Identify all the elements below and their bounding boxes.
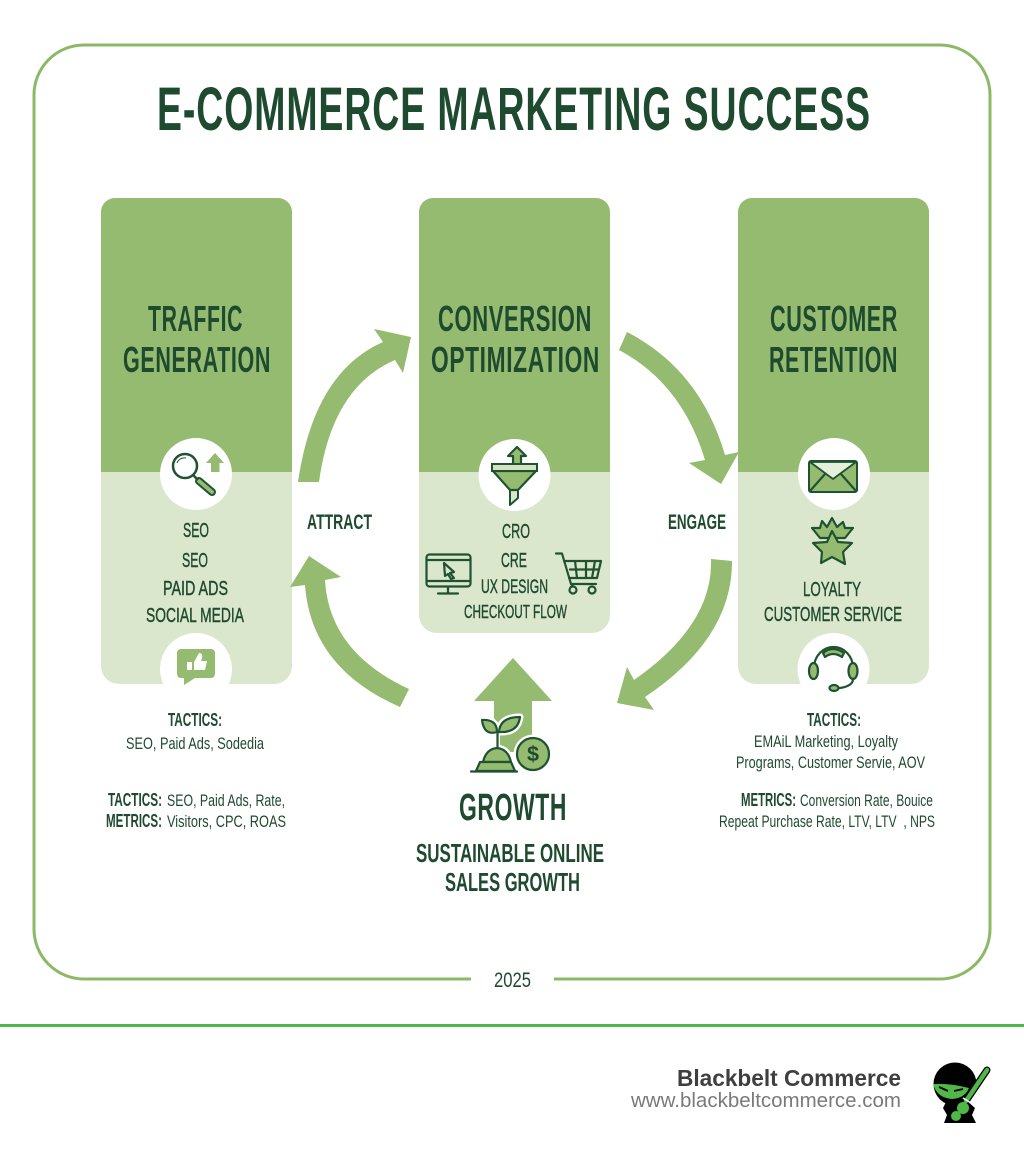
text: right metrics: Conversion Rate, Bouice: [800, 791, 933, 810]
list: traffic items: SOCIAL MEDIA: [146, 605, 244, 627]
list: retention items: CUSTOMER SERVICE: [764, 604, 902, 626]
panel: traffic generation: [101, 198, 292, 705]
heading: traffic generation: [123, 298, 271, 380]
icon: magnifier with arrow: [160, 438, 232, 510]
list: retention items: LOYALTY: [803, 579, 861, 601]
icon: envelope: [798, 438, 870, 510]
text: right tactics: Programs, Customer Servie, AOV: [736, 753, 925, 772]
text: left tactics and metrics: METRICS:: [106, 811, 162, 831]
panel: customer retention: [738, 198, 929, 705]
text: right metrics: Repeat Purchase Rate, LTV, LTV , NPS: [719, 812, 935, 831]
footer brand name: Blackbelt Commerce: [677, 1065, 901, 1091]
text: sustainable online sales growth: SUSTAINABLE ONLINE: [416, 838, 604, 868]
text: left tactics: TACTICS:: [168, 710, 222, 730]
footer url: www.blackbeltcommerce.com: [630, 1090, 901, 1112]
text: right metrics: [719, 790, 935, 831]
panel header background: [101, 198, 292, 472]
heading: conversion optimization: CONVERSION: [438, 298, 592, 339]
list: conversion items: CHECKOUT FLOW: [464, 602, 567, 622]
icon: growth arrow with sprout and coin: $: [527, 743, 539, 766]
panel body background: [738, 472, 929, 684]
heading: conversion optimization: [431, 298, 600, 380]
text: left tactics and metrics: TACTICS:: [108, 790, 162, 810]
list: traffic items: PAID ADS: [163, 578, 228, 600]
heading: customer retention: [769, 298, 898, 380]
arrow: growth up to traffic: [290, 556, 409, 707]
icon: thumbs up bubble: [160, 633, 232, 705]
text: sustainable online sales growth: [416, 838, 604, 897]
label: engage: ENGAGE: [668, 511, 726, 534]
icon: headset: [798, 633, 870, 705]
logo: ninja: [933, 1062, 987, 1123]
panel header background: [738, 198, 929, 472]
icon: shopping cart: [556, 554, 601, 594]
list: conversion items: [464, 521, 567, 622]
icon: crown and star: [812, 518, 853, 564]
list: traffic items: SEO: [182, 550, 208, 572]
heading: conversion optimization: OPTIMIZATION: [431, 339, 600, 380]
text: right metrics: METRICS:: [741, 790, 796, 810]
text: left tactics and metrics: SEO, Paid Ads, Rate,: [167, 791, 285, 810]
year label: 2025: [494, 969, 531, 992]
list: traffic items: SEO: [183, 520, 209, 542]
arrow: conversion down to retention: [619, 332, 739, 484]
text: left tactics: [126, 710, 264, 753]
text: right tactics: EMAiL Marketing, Loyalty: [754, 732, 898, 751]
text: left tactics: SEO, Paid Ads, Sodedia: [126, 734, 264, 753]
text: sustainable online sales growth: SALES GROWTH: [445, 867, 580, 897]
heading: traffic generation: TRAFFIC: [148, 298, 243, 339]
icon: growth arrow with sprout and coin: [471, 658, 552, 774]
text: left tactics and metrics: [106, 790, 286, 831]
list: conversion items: CRO: [502, 521, 530, 543]
list: conversion items: CRE: [501, 550, 527, 572]
arrow: retention down to growth: [617, 559, 732, 710]
list: retention items: [764, 579, 902, 626]
heading: traffic generation: GENERATION: [123, 339, 271, 380]
footer rule: [0, 1024, 1024, 1027]
label: attract: ATTRACT: [307, 511, 372, 534]
panel body background: [101, 472, 292, 684]
arrow: attract up to conversion: [298, 329, 411, 482]
heading: customer retention: RETENTION: [769, 339, 898, 380]
panel header background: [419, 198, 610, 472]
outer frame: [34, 45, 990, 979]
heading: customer retention: CUSTOMER: [770, 298, 898, 339]
icon: monitor with cursor: [426, 554, 470, 594]
list: conversion items: UX DESIGN: [481, 577, 548, 598]
heading: growth: GROWTH: [459, 787, 567, 829]
panel: conversion optimization: [419, 198, 610, 633]
panel body background: [419, 472, 610, 633]
text: left tactics and metrics: Visitors, CPC, ROAS: [167, 812, 286, 831]
text: right tactics: TACTICS:: [807, 710, 861, 730]
list: traffic items: [146, 520, 244, 627]
text: right tactics: [736, 710, 925, 772]
icon: funnel with arrow: [478, 439, 550, 511]
